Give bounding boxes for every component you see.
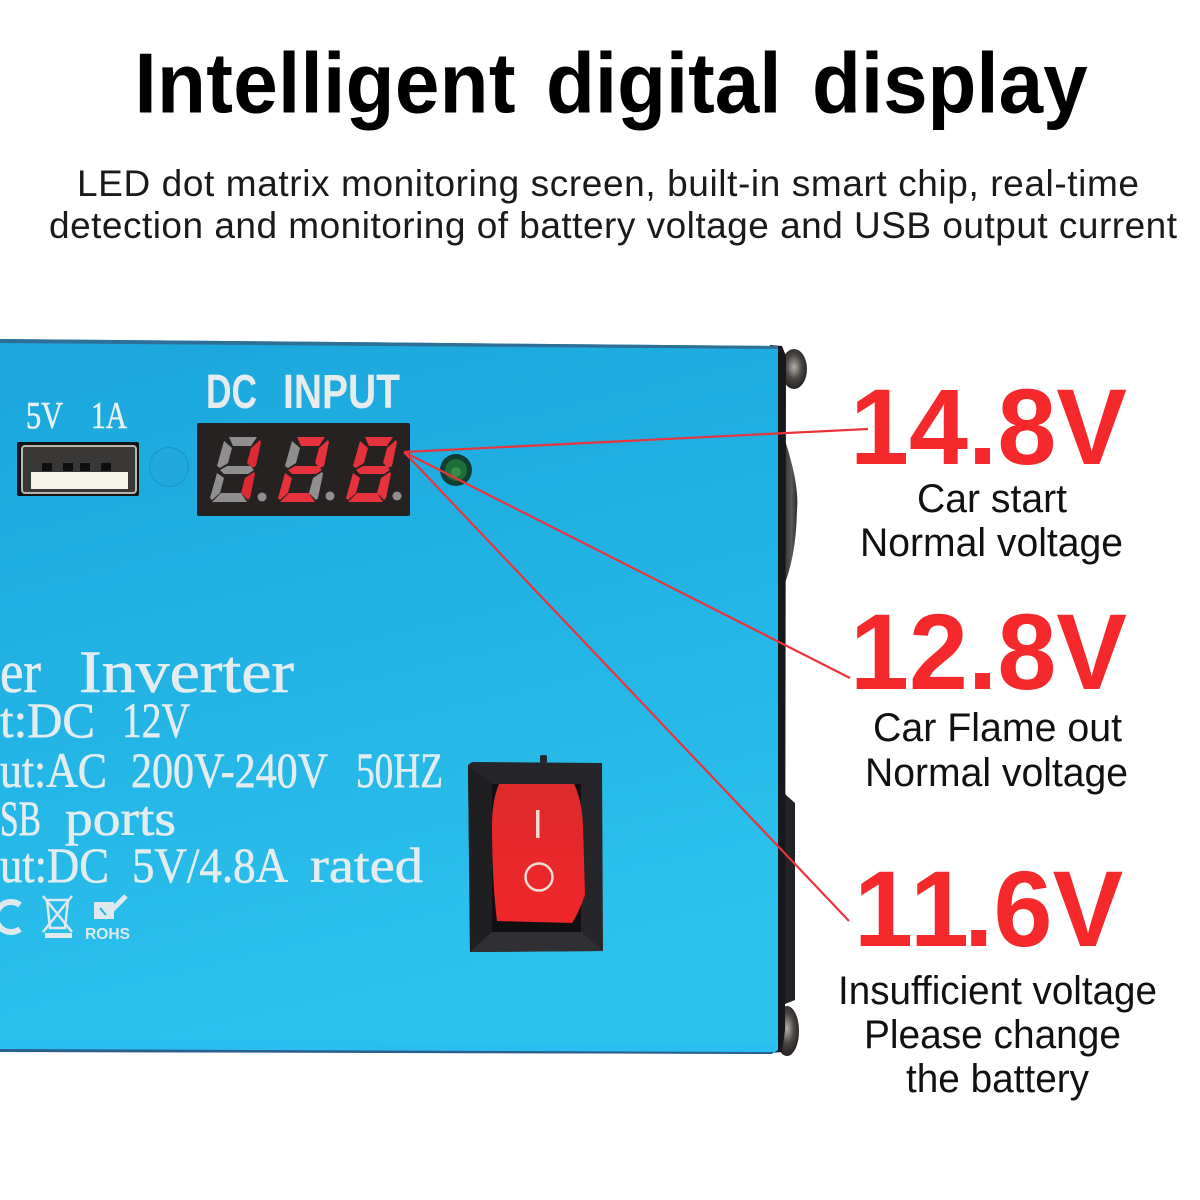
- icon: off mark: [526, 864, 552, 890]
- printed specifications: t:DC: [0, 692, 95, 748]
- callout: 12.8V: Car Flame out: [873, 706, 1122, 750]
- callout: 12.8V: Normal voltage: [865, 751, 1128, 795]
- icon: RoHS check box: ROHS: [85, 926, 130, 943]
- callout: 11.6V: Insufficient voltage: [838, 969, 1157, 1013]
- title: display: [812, 35, 1088, 131]
- digit 2: [278, 437, 329, 502]
- digit 1: [210, 437, 261, 502]
- USB label: 1A: [91, 395, 127, 437]
- title: digital: [546, 35, 781, 131]
- callout: 14.8V: 14.8V: [850, 366, 1127, 487]
- printed specifications: er: [0, 639, 41, 705]
- side hardware: screws, cylinder and block: [775, 349, 807, 1056]
- title: [134, 35, 1088, 131]
- inverter device photo: [0, 339, 807, 1056]
- callout: 11.6V: Please change: [864, 1013, 1121, 1057]
- callout: 12.8V: [850, 591, 1128, 795]
- printed specifications: [0, 639, 443, 893]
- blue front panel: [0, 339, 778, 1054]
- icon: on mark: [536, 810, 540, 838]
- DC INPUT label: [206, 366, 400, 419]
- printed specifications: Inverter: [79, 639, 294, 705]
- subtitle text block: detection and monitoring of battery voltage and USB output current: [49, 205, 1178, 246]
- digit 3: [346, 437, 397, 502]
- printed specifications: rated: [310, 837, 423, 893]
- USB port: [17, 442, 139, 496]
- callout: 14.8V: Normal voltage: [860, 521, 1123, 565]
- title: Intelligent: [134, 35, 515, 131]
- green LED: [440, 454, 472, 486]
- printed specifications: ports: [65, 790, 176, 846]
- USB label: [26, 395, 127, 437]
- printed specifications: 12V: [122, 692, 190, 748]
- round indent: [150, 448, 188, 486]
- printed specifications: SB: [0, 790, 41, 846]
- icon: crossed-out bin: [43, 896, 72, 938]
- USB label: 5V: [26, 395, 63, 437]
- icon: C mark: [0, 902, 20, 932]
- DC INPUT label: DC: [206, 366, 257, 419]
- callout: 14.8V: [850, 366, 1127, 565]
- callout: 11.6V: the battery: [906, 1057, 1089, 1101]
- printed specifications: 200V-240V: [131, 742, 328, 798]
- callout: 14.8V: Car start: [917, 477, 1067, 521]
- seven-segment display: [197, 423, 410, 516]
- dark side edge: [770, 345, 786, 1053]
- callout: 12.8V: 12.8V: [850, 591, 1127, 712]
- callout lines: [404, 429, 868, 921]
- subtitle text block: [49, 163, 1178, 246]
- printed specifications: 50HZ: [356, 742, 443, 798]
- DC INPUT label: INPUT: [283, 366, 400, 419]
- certification icons: [0, 896, 130, 943]
- rocker switch: [468, 755, 603, 952]
- callout: 11.6V: [838, 848, 1157, 1101]
- subtitle text block: LED dot matrix monitoring screen, built-in smart chip, real-time: [77, 163, 1139, 204]
- callout: 11.6V: 11.6V: [854, 848, 1123, 969]
- printed specifications: ut:AC: [0, 742, 107, 798]
- printed specifications: ut:DC: [0, 837, 109, 893]
- printed specifications: 5V/4.8A: [132, 837, 288, 893]
